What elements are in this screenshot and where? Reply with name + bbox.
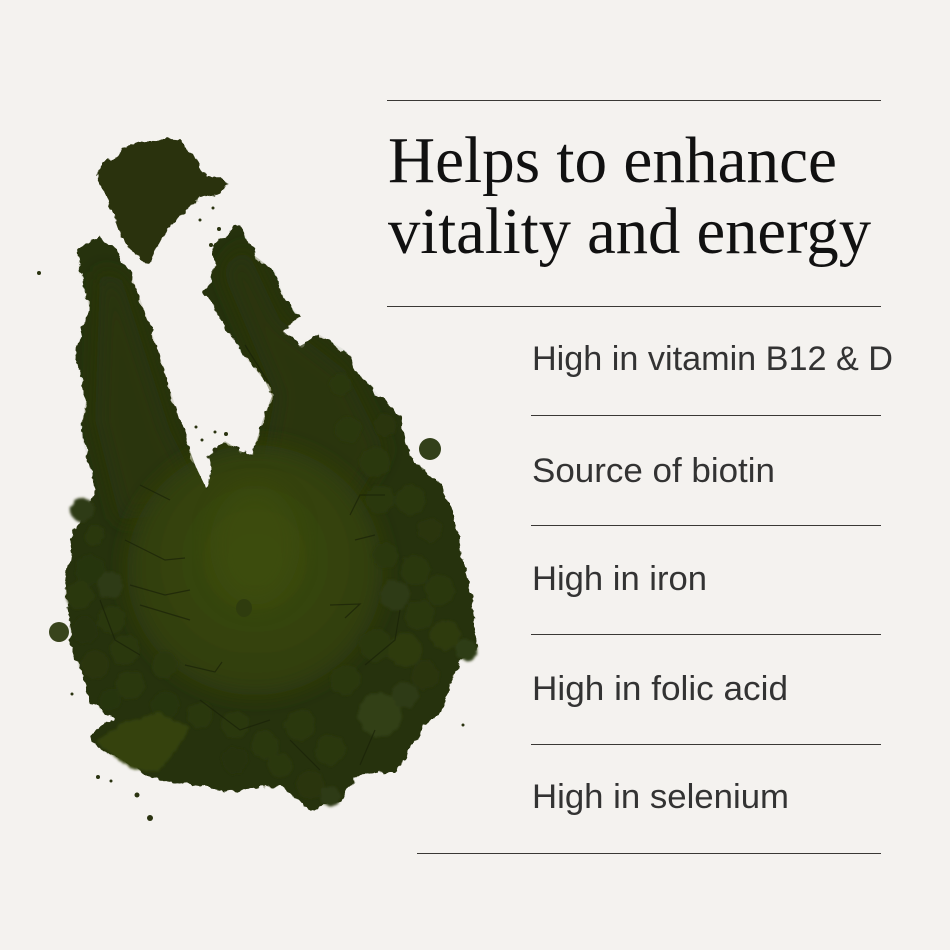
benefit: folic acid: High in folic acid — [532, 670, 788, 708]
powder: centre speck — [236, 599, 252, 617]
infographic page — [37, 100, 892, 854]
powder: small specks — [37, 206, 464, 821]
benefit: biotin: Source of biotin — [532, 452, 775, 490]
powder: smooth centre — [127, 445, 383, 695]
powder: bright centre glow — [210, 485, 300, 605]
rule above title — [387, 100, 881, 101]
powder: stray granule left — [49, 622, 69, 642]
title: vitality and energy — [388, 195, 871, 268]
powder: dark cracks — [100, 345, 400, 770]
benefit: selenium: High in selenium — [532, 778, 789, 816]
benefit list — [417, 340, 893, 854]
powder: stray granule right — [419, 438, 441, 460]
benefit: iron: High in iron — [532, 560, 707, 598]
rule below title — [387, 306, 881, 307]
powder: clumps — [66, 374, 477, 806]
powder: top fragment — [97, 138, 228, 263]
powder: left stripe — [95, 270, 210, 520]
powder: large flat lump, bottom left — [96, 712, 190, 772]
benefit: vitamin B12 and D: High in vitamin B12 & D — [532, 340, 893, 378]
powder: upper right ridge — [209, 234, 378, 454]
powder: shaded interior, clipped to the pile — [95, 245, 385, 695]
title: Helps to enhance — [388, 124, 837, 197]
powder pile illustration — [37, 138, 478, 821]
powder: main body — [65, 224, 478, 811]
